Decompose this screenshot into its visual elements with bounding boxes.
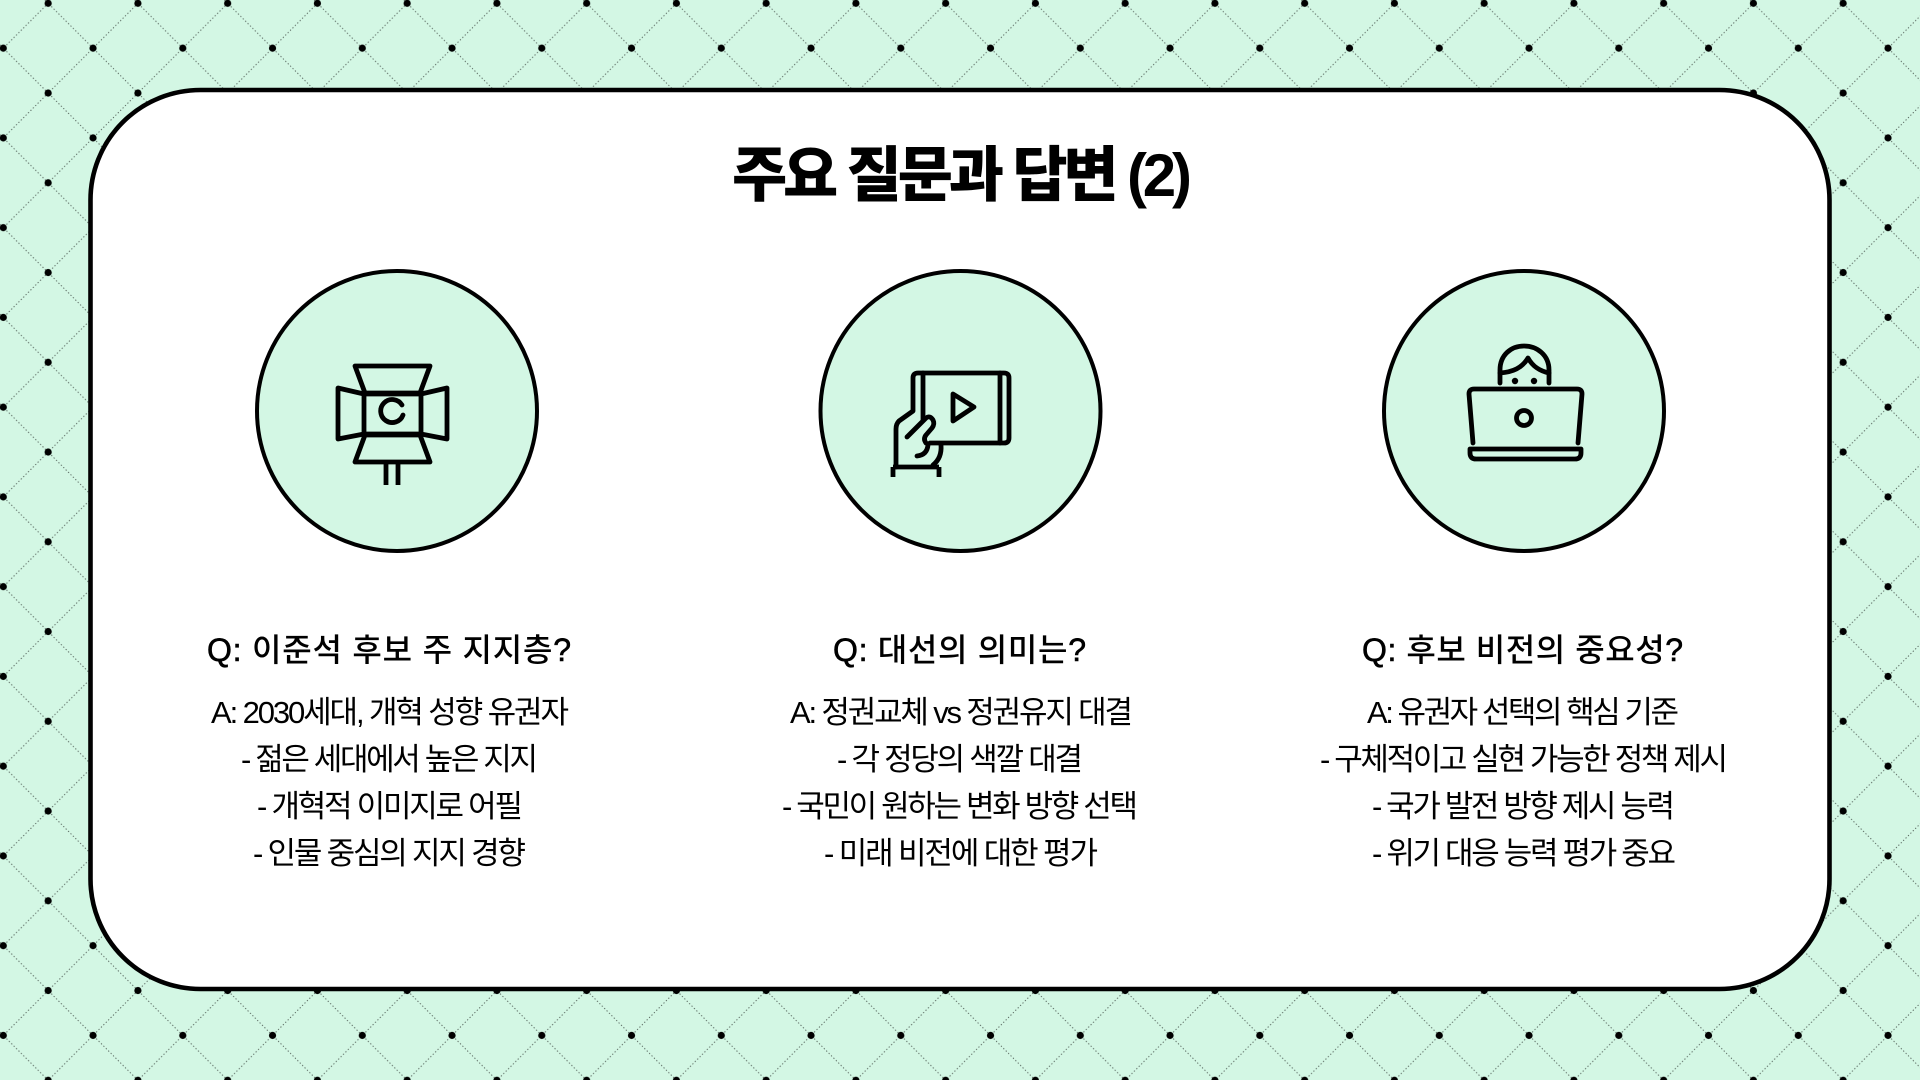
answer text 3: - 위기 대응 능력 평가 중요	[1372, 836, 1676, 871]
answer text 2: - 각 정당의 색깔 대결	[837, 742, 1083, 777]
main white card	[90, 90, 1830, 989]
answer text 1: - 인물 중심의 지지 경향	[253, 836, 526, 871]
icon circle 3	[1384, 271, 1664, 551]
answer text 2: - 국민이 원하는 변화 방향 선택	[782, 789, 1138, 824]
answer text 3	[1320, 695, 1728, 871]
answer text 3: - 국가 발전 방향 제시 능력	[1372, 789, 1675, 824]
answer text 2: A: 정권교체 vs 정권유지 대결	[790, 695, 1133, 730]
answer text 3: A: 유권자 선택의 핵심 기준	[1367, 695, 1679, 730]
answer text 3: - 구체적이고 실현 가능한 정책 제시	[1320, 742, 1728, 777]
question heading 3: Q: 후보 비전의 중요성?	[1362, 632, 1683, 668]
panel: question 1	[207, 271, 571, 871]
icon: person behind laptop	[1469, 346, 1582, 459]
answer text 1	[211, 695, 569, 871]
question heading 1: Q: 이준석 후보 주 지지층?	[207, 632, 571, 668]
icon: hand holding video tablet	[893, 373, 1009, 477]
panel: question 2	[782, 271, 1138, 871]
icon circle 1	[257, 271, 537, 551]
icon: spotlight with barn doors	[338, 366, 447, 485]
answer text 1: - 젊은 세대에서 높은 지지	[241, 742, 538, 777]
answer text 1: A: 2030세대, 개혁 성향 유권자	[211, 695, 569, 730]
question heading 2: Q: 대선의 의미는?	[833, 632, 1086, 668]
title: 주요 질문과 답변 (2)	[732, 142, 1192, 209]
panel: question 3	[1320, 271, 1728, 871]
answer text 1: - 개혁적 이미지로 어필	[257, 789, 523, 824]
answer text 2: - 미래 비전에 대한 평가	[824, 836, 1098, 871]
icon circle 2	[820, 271, 1100, 551]
answer text 2	[782, 695, 1138, 871]
